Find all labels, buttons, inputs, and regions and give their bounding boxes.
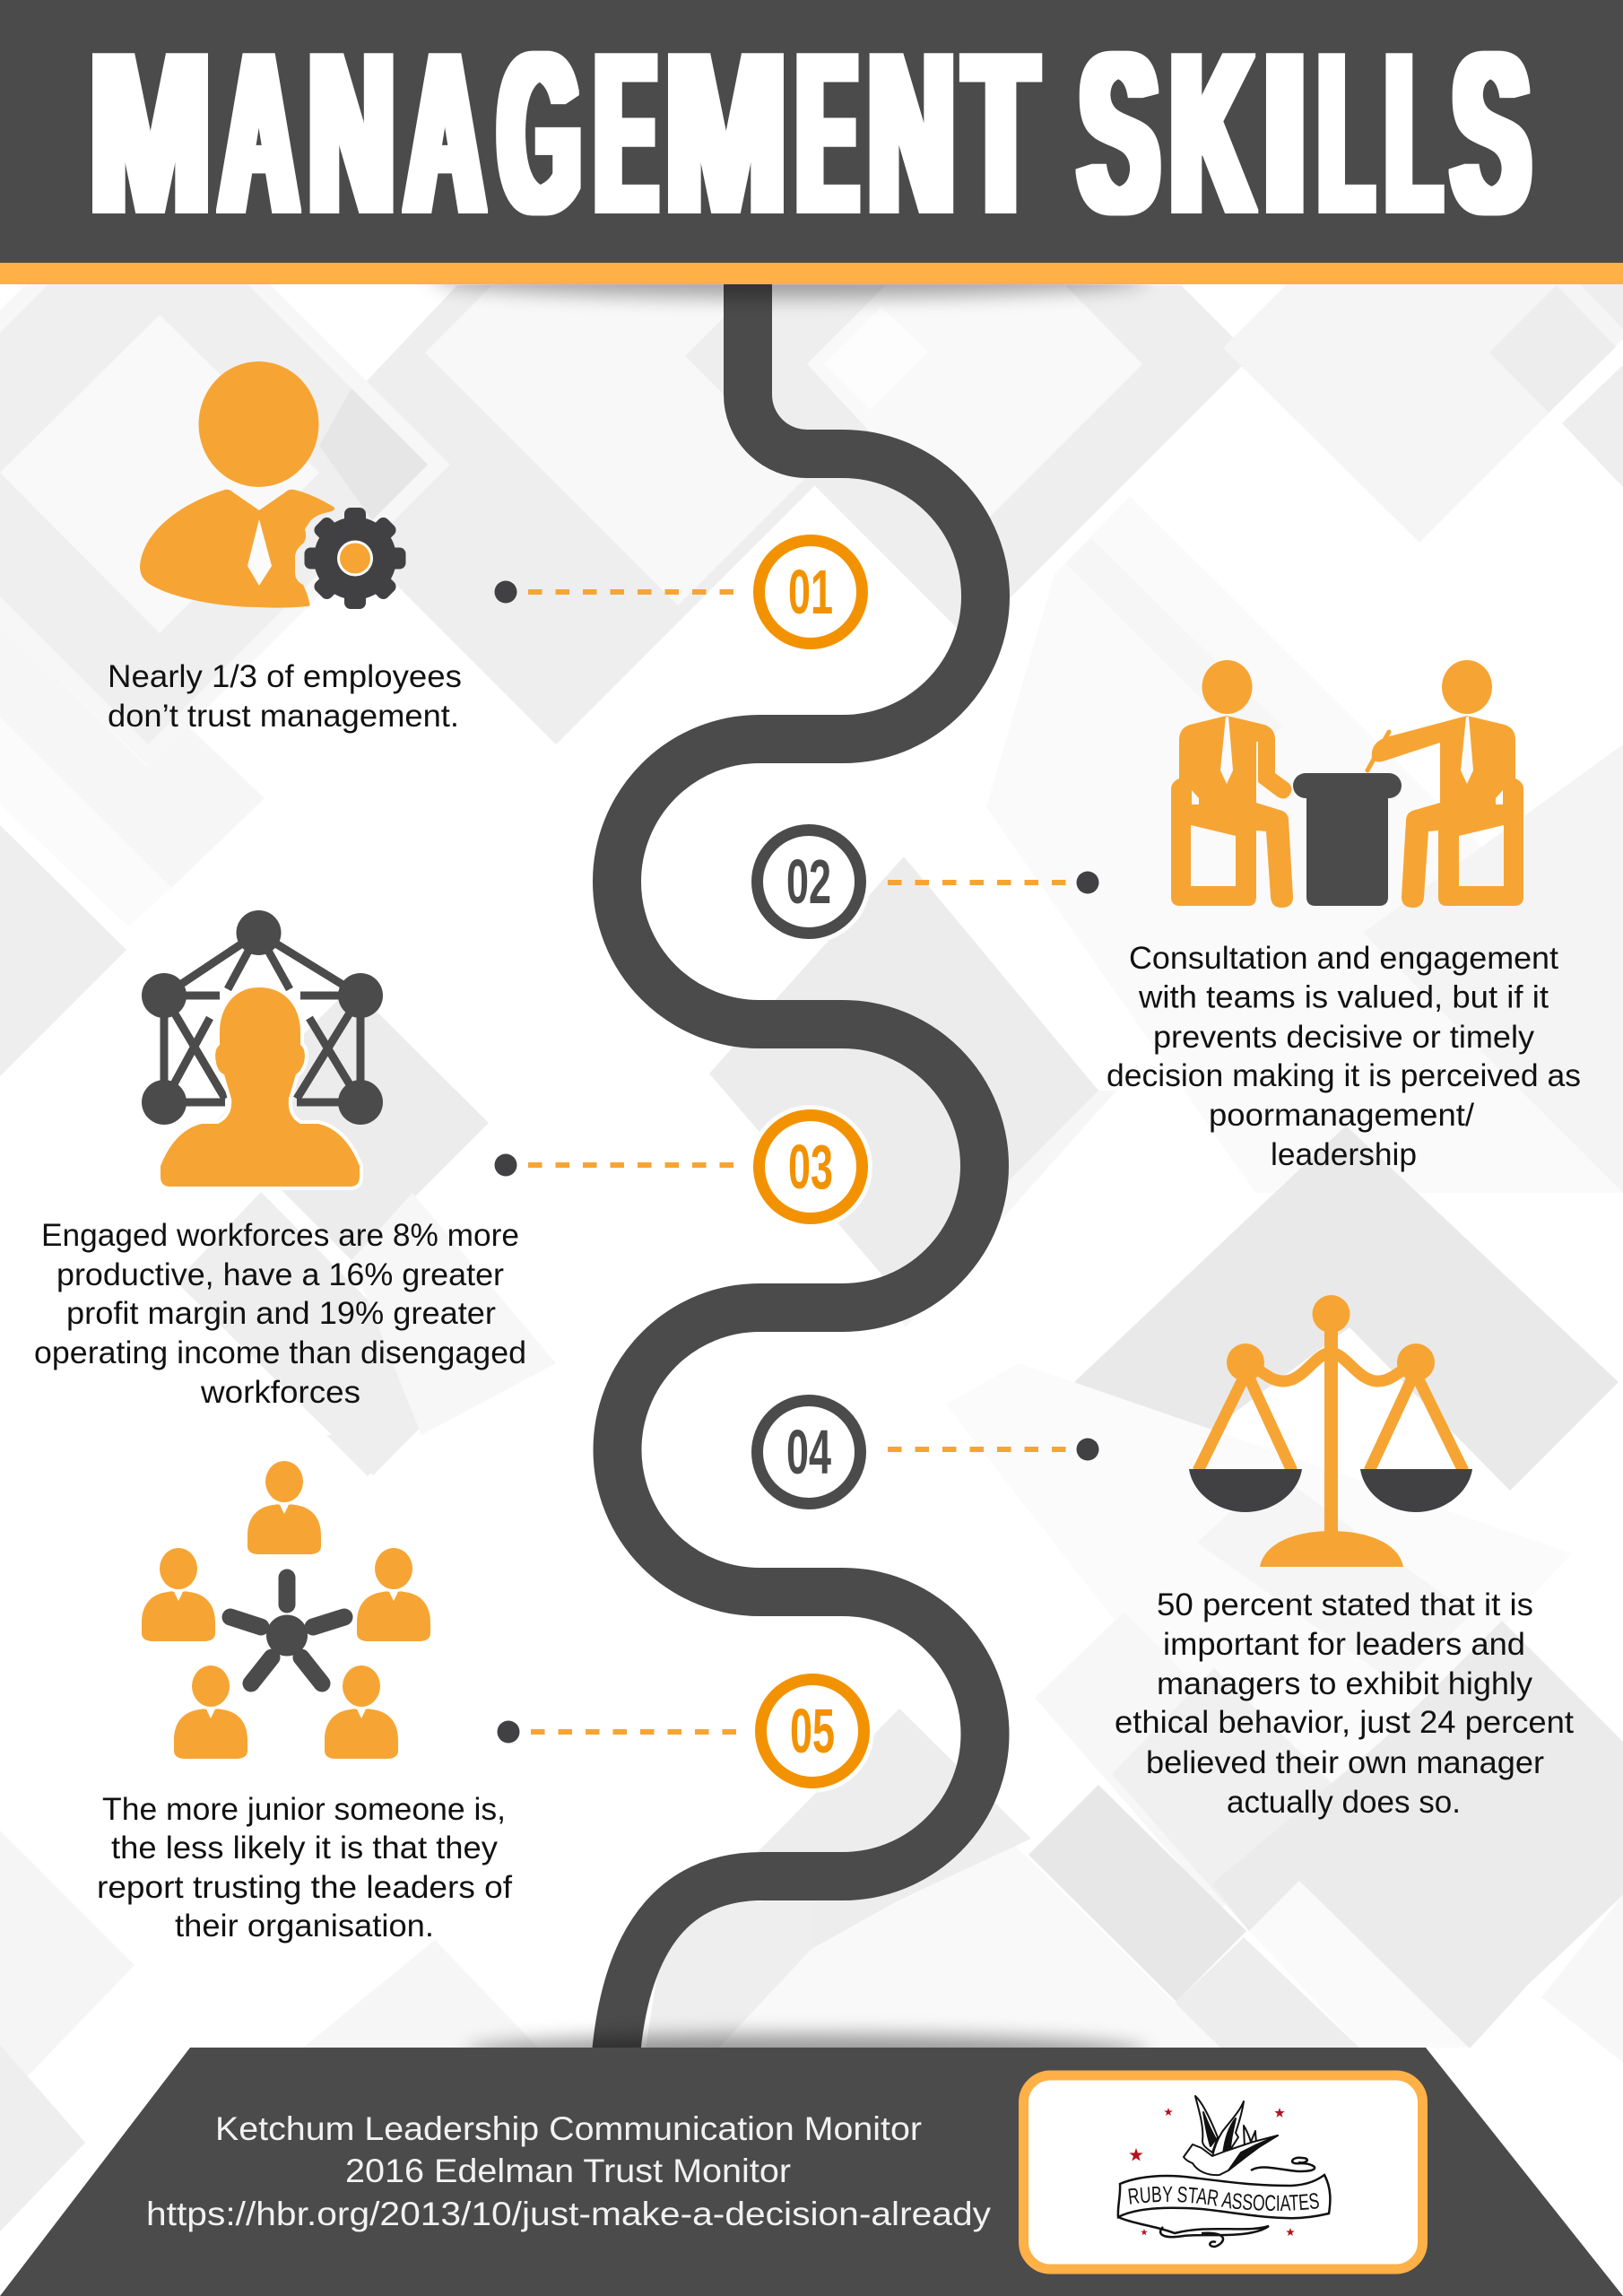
person top [247, 1461, 321, 1554]
text block 4: important for leaders and [1163, 1627, 1525, 1662]
text block 4: 50 percent stated that it is [1157, 1587, 1533, 1622]
logo card [1019, 2070, 1428, 2274]
footer banner [0, 2048, 1623, 2296]
text block 3 [34, 1218, 526, 1410]
panel 1: trust [108, 361, 735, 734]
icon: two people at a table [1171, 660, 1523, 908]
text block 1: Nearly 1/3 of employees [108, 659, 462, 694]
connector 1 [495, 581, 735, 603]
title: A [221, 5, 297, 260]
text block 2: Consultation and engagement [1129, 941, 1558, 976]
badge 01 [749, 530, 872, 654]
badge 04 [747, 1390, 871, 1514]
badge 02 [747, 820, 871, 944]
title: T [965, 5, 1037, 260]
badge 03: 03 [788, 1132, 833, 1202]
connector 3 [495, 1153, 735, 1177]
text block 4: ethical behavior, just 24 percent [1115, 1705, 1574, 1740]
title: N [309, 5, 394, 260]
sources: https://hbr.org/2013/10/just-make-a-decision-already [146, 2196, 992, 2232]
badge 05: 05 [790, 1696, 835, 1766]
title: S [1453, 5, 1530, 260]
title: A [406, 5, 483, 260]
title: I [1263, 5, 1307, 260]
icon: manager with gear [140, 361, 405, 609]
header banner [0, 0, 1623, 284]
title: L [1320, 5, 1372, 260]
text block 2: decision making it is perceived as [1107, 1058, 1581, 1093]
icon: network person [142, 910, 383, 1187]
text block 5: report trusting the leaders of [97, 1870, 512, 1905]
footer shadow [466, 2034, 1148, 2070]
text block 5 [97, 1792, 512, 1944]
title: E [596, 5, 655, 260]
panel 3: engagement [34, 910, 735, 1410]
badge 04: 04 [786, 1417, 831, 1487]
title: E [798, 5, 856, 260]
text block 2 [1107, 941, 1581, 1172]
person left [142, 1548, 215, 1641]
icon: scales [1189, 1295, 1472, 1567]
panel 4: ethics [888, 1295, 1574, 1820]
text block 4: actually does so. [1227, 1785, 1461, 1820]
header shadow [430, 258, 1148, 298]
title [90, 5, 1530, 260]
badge 03 [749, 1105, 872, 1229]
text block 5: The more junior someone is, [102, 1792, 506, 1827]
person lower right [325, 1665, 398, 1759]
logo: wordmark: RUBY STAR ASSOCIATES [1128, 2187, 1319, 2212]
title: L [1387, 5, 1440, 260]
text block 3: Engaged workforces are 8% more [41, 1218, 519, 1253]
icon: team around hub [142, 1461, 430, 1759]
person right [357, 1548, 430, 1641]
title: K [1171, 5, 1253, 260]
text block 5: their organisation. [175, 1909, 434, 1944]
text block 3: workforces [200, 1375, 360, 1410]
text block 3: operating income than disengaged [34, 1335, 526, 1370]
sources: 2016 Edelman Trust Monitor [345, 2152, 791, 2189]
text block 5: the less likely it is that they [111, 1831, 499, 1866]
title: G [499, 5, 580, 260]
badge 05 [751, 1669, 874, 1793]
logo: swallow [1184, 2096, 1278, 2175]
connector 5 [497, 1720, 737, 1744]
connector 4 [888, 1439, 1099, 1460]
title: N [869, 5, 954, 260]
text block 1: don’t trust management. [108, 699, 459, 734]
panel 2: consultation [888, 660, 1581, 1172]
text block 1 [108, 659, 462, 734]
winding road [616, 283, 985, 2054]
text block 2: with teams is valued, but if it [1138, 979, 1549, 1015]
title: M [90, 5, 211, 260]
text block 4: believed their own manager [1146, 1745, 1544, 1780]
title: M [665, 5, 786, 260]
text block 2: leadership [1271, 1137, 1417, 1172]
badge 01: 01 [788, 557, 833, 627]
icon: gear [305, 508, 405, 609]
sources [146, 2110, 992, 2232]
badge 02: 02 [786, 847, 831, 917]
text block 2: poormanagement/ [1209, 1098, 1474, 1133]
logo: stars [1129, 2108, 1295, 2236]
sources: Ketchum Leadership Communication Monitor [215, 2110, 922, 2147]
text block 4: managers to exhibit highly [1157, 1666, 1533, 1701]
text block 4 [1115, 1587, 1574, 1820]
person lower left [174, 1665, 247, 1759]
text block 3: productive, have a 16% greater [56, 1257, 504, 1292]
text block 2: prevents decisive or timely [1153, 1020, 1535, 1055]
panel 5: junior staff [97, 1461, 737, 1944]
logo: ribbon [1118, 2158, 1330, 2247]
connector 2 [888, 872, 1099, 893]
text block 3: profit margin and 19% greater [66, 1296, 496, 1331]
title: S [1080, 5, 1159, 260]
